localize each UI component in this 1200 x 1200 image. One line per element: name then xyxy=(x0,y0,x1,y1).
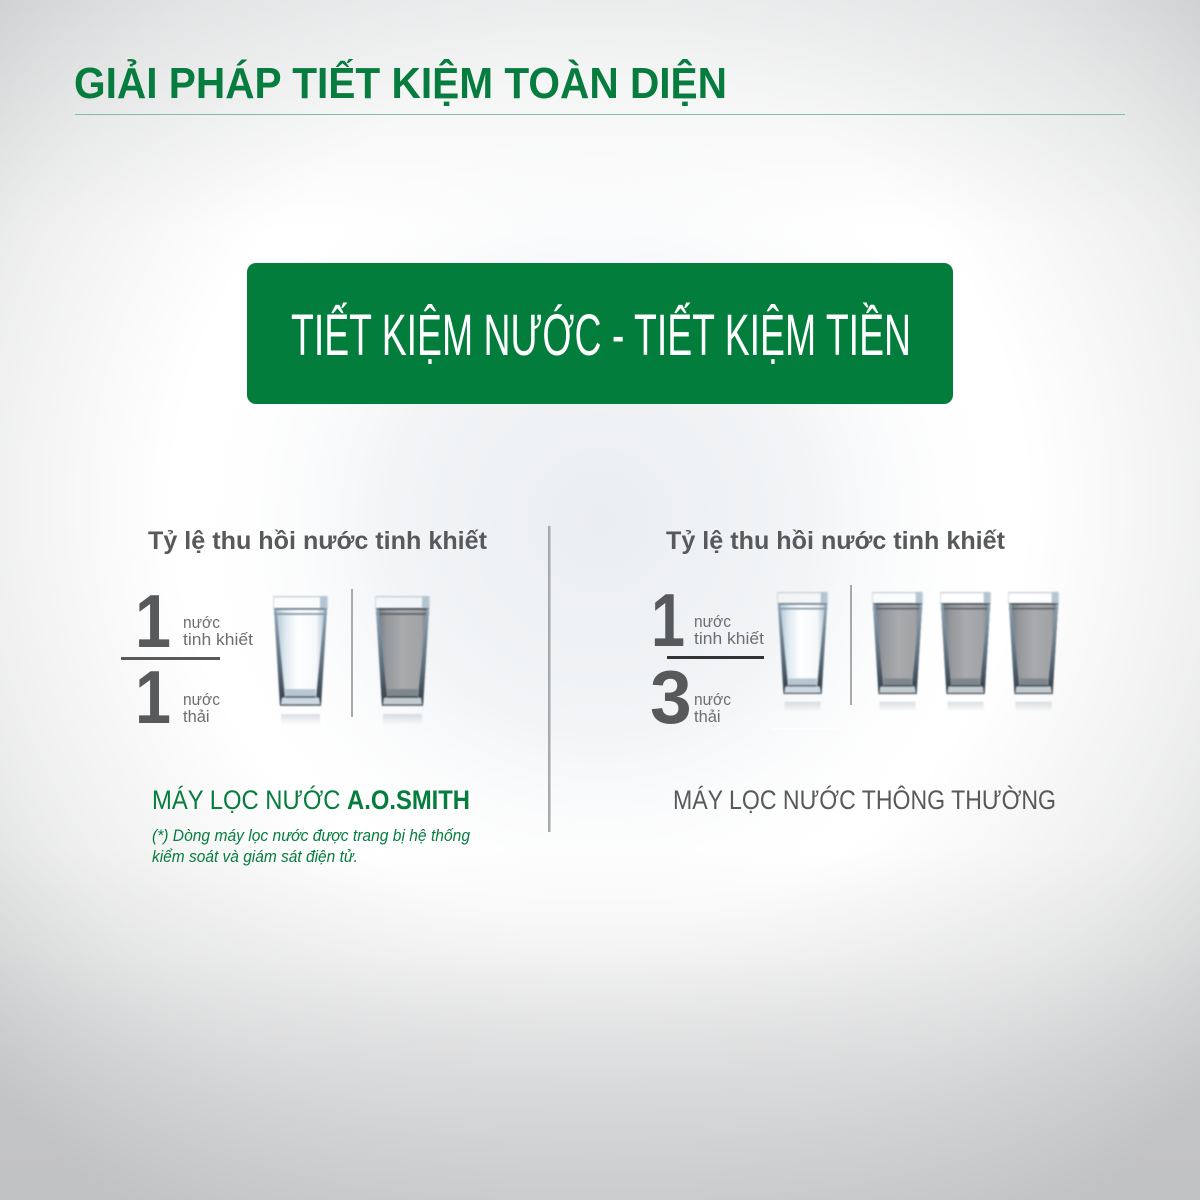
banner xyxy=(247,263,953,404)
ratio: 1 to 3: nước xyxy=(694,613,731,631)
panel: conventional machine xyxy=(650,527,1059,815)
ratio: 1 to 1: nước xyxy=(183,691,220,709)
icon: clear water glass xyxy=(777,592,828,712)
footnote: (*) Dòng máy lọc nước được trang bị hệ thống xyxy=(152,826,471,845)
ratio: 1 to 3: 1 xyxy=(651,578,685,662)
heading: left recovery ratio: Tỷ lệ thu hồi nước tinh khiết xyxy=(148,527,488,555)
icon: waste water glass xyxy=(376,596,430,725)
label: A.O.Smith machine: MÁY LỌC NƯỚC A.O.SMITH xyxy=(152,784,470,815)
icon: clear water glass xyxy=(274,596,328,725)
ratio: 1 to 3: tinh khiết xyxy=(694,630,764,648)
icon: waste water glass 1 xyxy=(872,592,923,712)
ratio: 1 to 3: thải xyxy=(694,708,721,726)
icon: waste water glass 2 xyxy=(940,592,991,712)
panel: A.O.Smith xyxy=(121,527,488,866)
ratio: 1 to 3: 3 xyxy=(650,655,692,739)
ratio: 1 to 1: 1 xyxy=(135,579,171,663)
ratio: 1 to 1: nước xyxy=(183,614,220,632)
heading: right recovery ratio: Tỷ lệ thu hồi nước tinh khiết xyxy=(666,527,1006,555)
ratio: 1 to 3: nước xyxy=(694,691,731,709)
ratio: 1 to 1 xyxy=(121,579,253,739)
footnote xyxy=(152,826,471,866)
ratio: 1 to 3 xyxy=(650,578,764,739)
footnote: kiểm soát và giám sát điện tử. xyxy=(152,847,358,866)
label: conventional machine: MÁY LỌC NƯỚC THÔNG THƯỜNG xyxy=(673,784,1056,815)
title: GIẢI PHÁP TIẾT KIỆM TOÀN DIỆN xyxy=(74,58,727,108)
ratio: 1 to 1: tinh khiết xyxy=(183,631,253,649)
icon: waste water glass 3 xyxy=(1008,592,1059,712)
ratio: 1 to 1: thải xyxy=(183,708,210,726)
ratio: 1 to 1: 1 xyxy=(135,655,171,739)
